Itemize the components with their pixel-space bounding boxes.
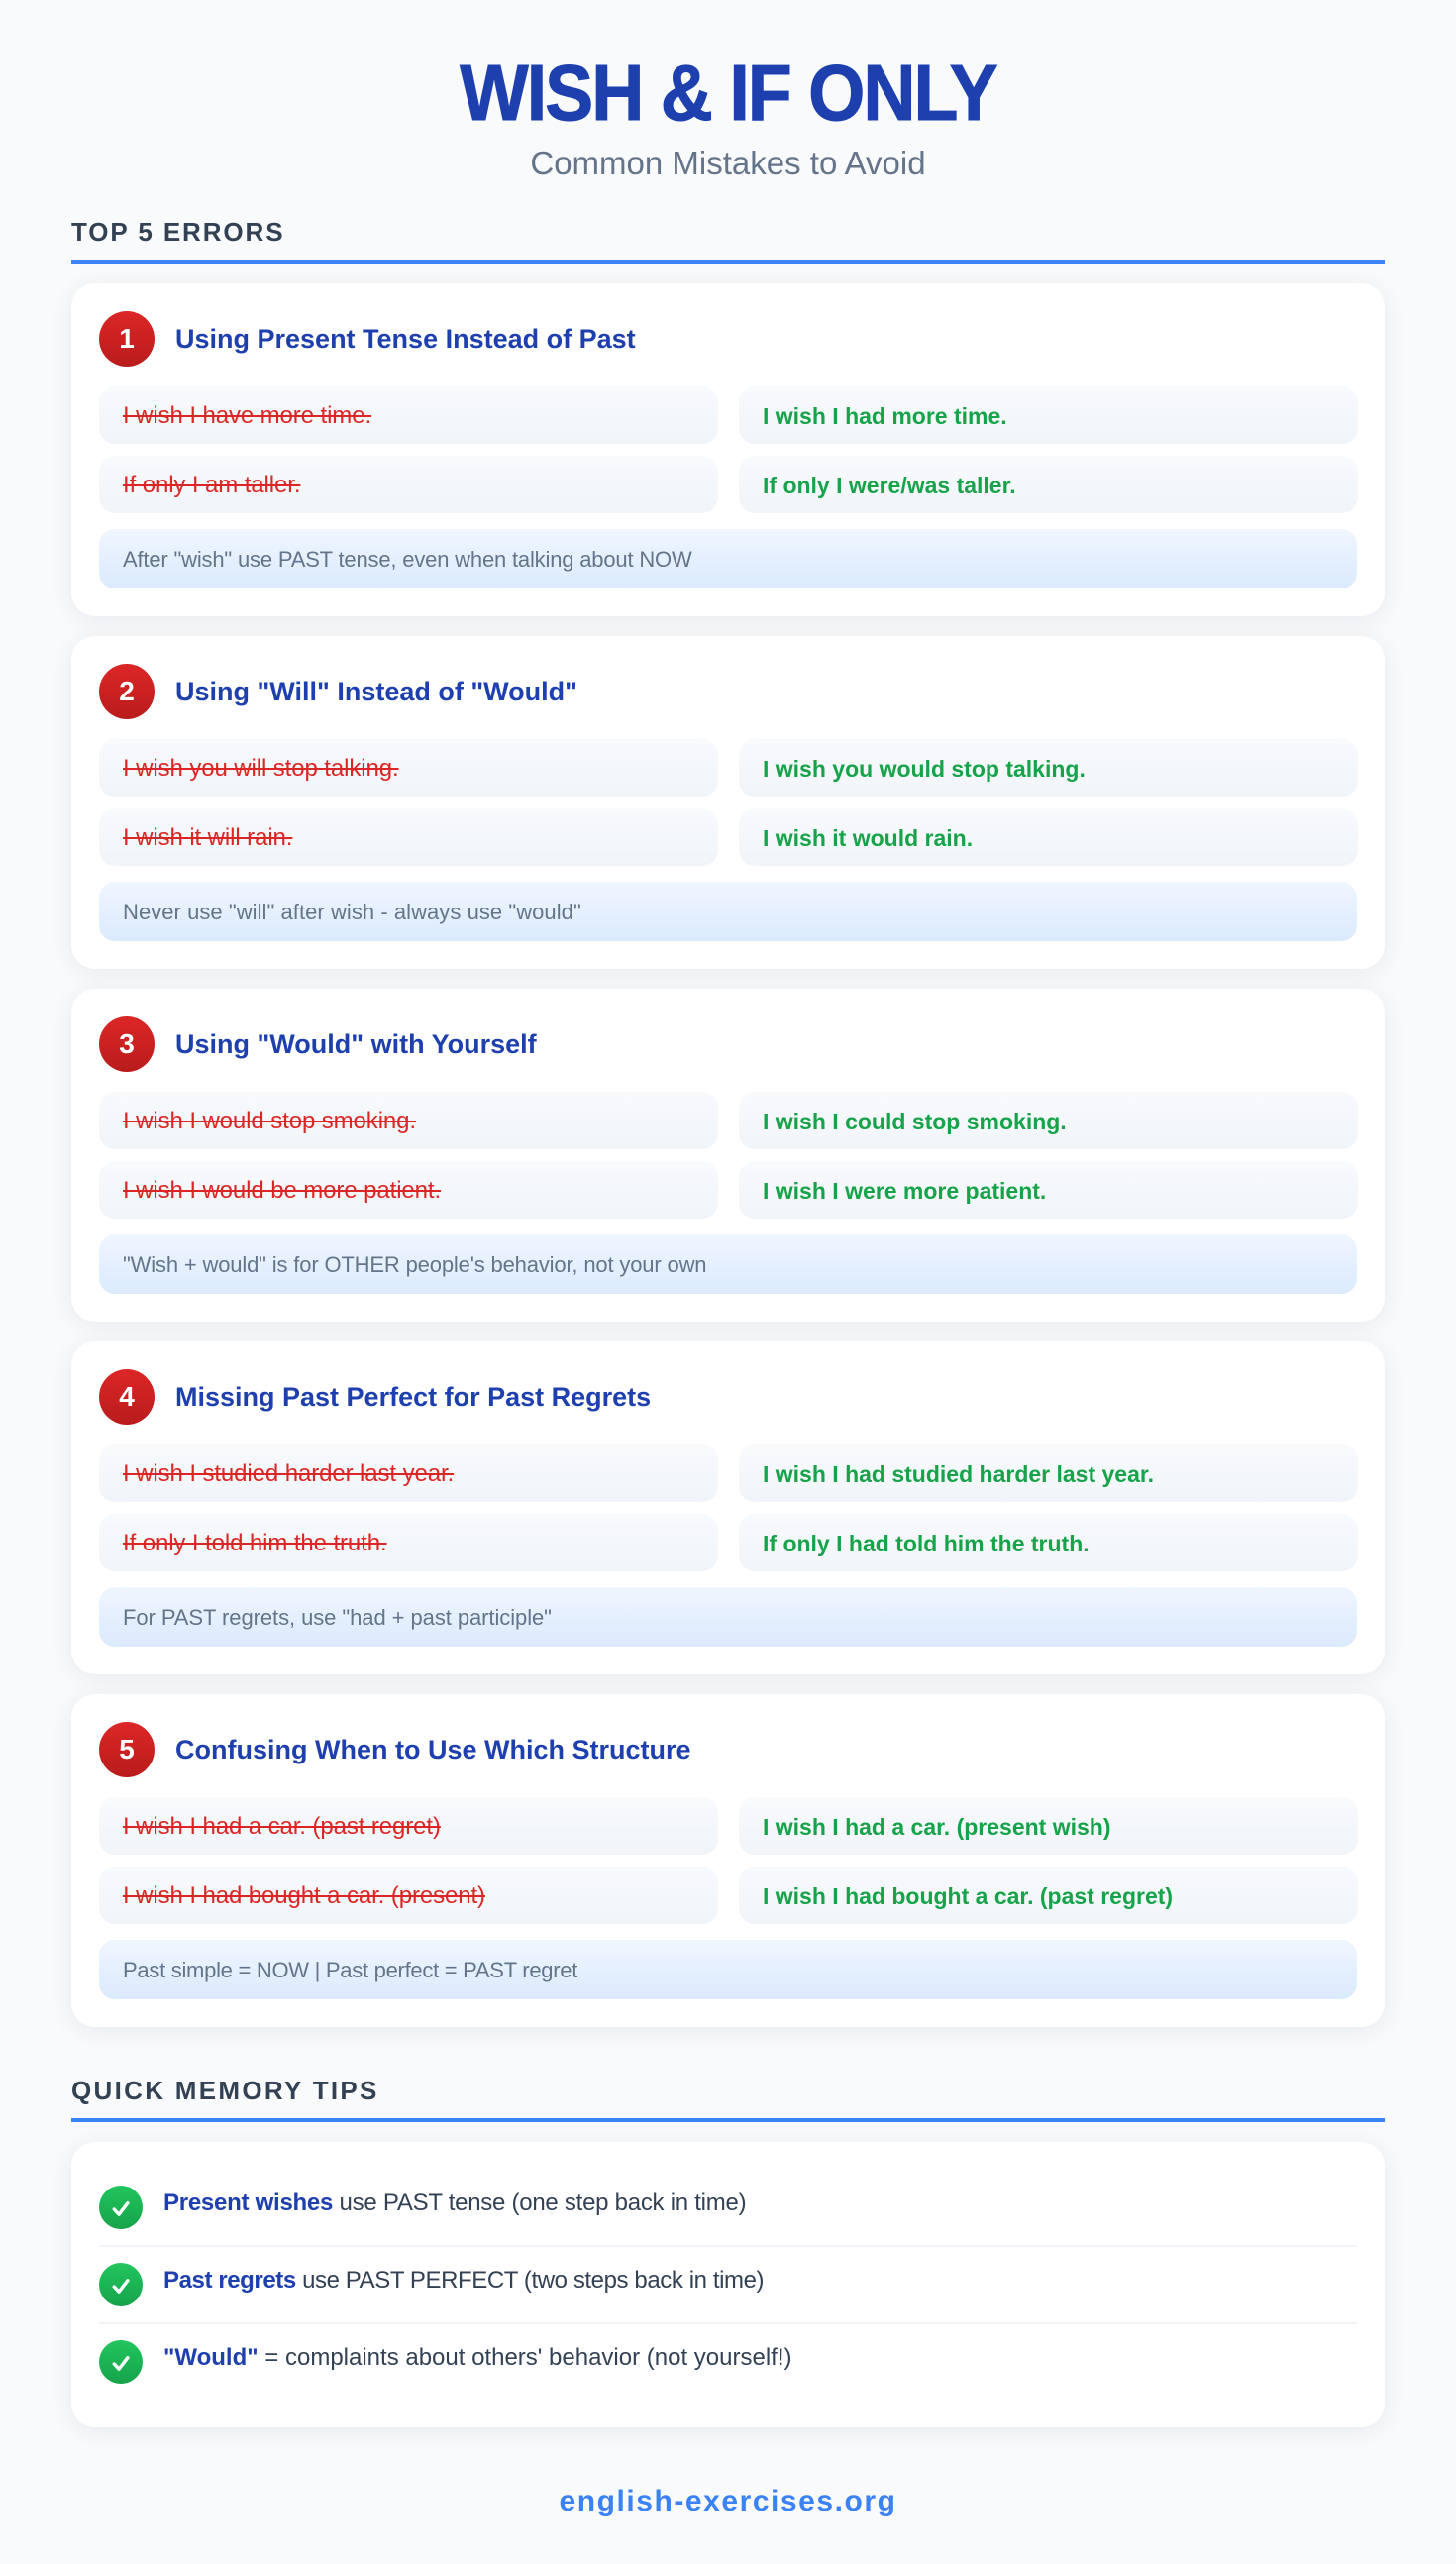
number badge 1 bbox=[99, 311, 155, 367]
correct example bbox=[739, 1797, 1358, 1855]
correct example: I wish you would stop talking. bbox=[763, 756, 1086, 782]
wrong example bbox=[99, 386, 718, 444]
wrong example bbox=[99, 1161, 718, 1219]
correct example: I wish it would rain. bbox=[763, 825, 973, 851]
wrong example: I wish I had a car. (past regret) bbox=[123, 1813, 441, 1840]
wrong example bbox=[99, 808, 718, 866]
panel: error 5 bbox=[71, 1694, 1385, 2027]
error 5 heading: Confusing When to Use Which Structure bbox=[175, 1735, 691, 1764]
wrong example bbox=[99, 1092, 718, 1149]
error 4 heading: Missing Past Perfect for Past Regrets bbox=[175, 1382, 651, 1412]
tip 1 bbox=[99, 2186, 746, 2229]
correct example: I wish I had studied harder last year. bbox=[763, 1461, 1154, 1487]
rule note: After "wish" use PAST tense, even when talking about NOW bbox=[123, 547, 692, 572]
panel: error 1 bbox=[71, 283, 1385, 616]
correct example: If only I were/was taller. bbox=[763, 473, 1016, 498]
wrong example: I wish I had bought a car. (present) bbox=[123, 1882, 485, 1909]
panel: memory tips bbox=[71, 2142, 1385, 2427]
number badge 1: 1 bbox=[119, 323, 135, 354]
rule note: Past simple = NOW | Past perfect = PAST regret bbox=[123, 1958, 577, 1982]
wrong example: I wish I would be more patient. bbox=[123, 1177, 441, 1204]
subtitle: Common Mistakes to Avoid bbox=[530, 145, 926, 181]
section heading: quick memory tips: QUICK MEMORY TIPS bbox=[71, 2076, 379, 2105]
correct example bbox=[739, 1867, 1358, 1924]
wrong example: I wish I studied harder last year. bbox=[123, 1460, 454, 1487]
tip 2 text: Past regrets use PAST PERFECT (two steps back in time) bbox=[163, 2267, 764, 2294]
panel: error 3 bbox=[71, 989, 1385, 1322]
correct example bbox=[739, 1092, 1358, 1149]
number badge 4 bbox=[99, 1369, 155, 1425]
icon: check bbox=[99, 2263, 143, 2306]
wrong example bbox=[99, 1444, 718, 1502]
rule note bbox=[99, 529, 1357, 588]
rule note: Never use "will" after wish - always use "would" bbox=[123, 900, 581, 924]
tip 2 bbox=[99, 2263, 764, 2306]
rule note: For PAST regrets, use "had + past participle" bbox=[123, 1605, 552, 1630]
wrong example bbox=[99, 739, 718, 797]
wrong example: I wish I would stop smoking. bbox=[123, 1108, 416, 1134]
correct example bbox=[739, 456, 1358, 513]
rule note bbox=[99, 882, 1357, 941]
rule note bbox=[99, 1587, 1357, 1647]
correct example bbox=[739, 1161, 1358, 1219]
correct example: I wish I had a car. (present wish) bbox=[763, 1814, 1111, 1840]
wrong example bbox=[99, 1514, 718, 1571]
correct example bbox=[739, 739, 1358, 797]
wrong example: I wish it will rain. bbox=[123, 824, 292, 851]
correct example bbox=[739, 808, 1358, 866]
icon: check bbox=[99, 2340, 143, 2384]
wrong example bbox=[99, 1797, 718, 1855]
correct example: I wish I were more patient. bbox=[763, 1178, 1046, 1204]
wrong example bbox=[99, 1867, 718, 1924]
footer: english-exercises.org bbox=[559, 2485, 897, 2517]
number badge 5 bbox=[99, 1722, 155, 1777]
error 1 heading: Using Present Tense Instead of Past bbox=[175, 324, 636, 354]
rule note bbox=[99, 1234, 1357, 1294]
number badge 2 bbox=[99, 664, 155, 719]
error 2 heading: Using "Will" Instead of "Would" bbox=[175, 677, 577, 706]
section heading: top 5 errors: TOP 5 ERRORS bbox=[71, 217, 284, 247]
tip 1 text: Present wishes use PAST tense (one step back in time) bbox=[163, 2190, 746, 2216]
number badge 2: 2 bbox=[119, 676, 135, 706]
wrong example: If only I am taller. bbox=[123, 472, 300, 498]
tip 3 text: "Would" = complaints about others' behavior (not yourself!) bbox=[163, 2344, 792, 2371]
title: WISH & IF ONLY bbox=[460, 49, 996, 137]
correct example: I wish I could stop smoking. bbox=[763, 1109, 1067, 1134]
correct example: I wish I had more time. bbox=[763, 403, 1007, 429]
icon: check bbox=[99, 2186, 143, 2229]
wrong example: I wish you will stop talking. bbox=[123, 755, 399, 782]
rule note: "Wish + would" is for OTHER people's behavior, not your own bbox=[123, 1252, 706, 1277]
wrong example bbox=[99, 456, 718, 513]
panel: error 2 bbox=[71, 636, 1385, 969]
correct example bbox=[739, 1444, 1358, 1502]
number badge 5: 5 bbox=[119, 1734, 135, 1764]
error 3 heading: Using "Would" with Yourself bbox=[175, 1029, 537, 1059]
wrong example: I wish I have more time. bbox=[123, 402, 371, 429]
rule note bbox=[99, 1940, 1357, 1999]
number badge 3: 3 bbox=[119, 1028, 135, 1059]
correct example bbox=[739, 386, 1358, 444]
correct example bbox=[739, 1514, 1358, 1571]
panel: error 4 bbox=[71, 1341, 1385, 1674]
number badge 4: 4 bbox=[119, 1381, 135, 1412]
correct example: I wish I had bought a car. (past regret) bbox=[763, 1883, 1173, 1909]
tip 3 bbox=[99, 2340, 792, 2384]
number badge 3 bbox=[99, 1016, 155, 1072]
correct example: If only I had told him the truth. bbox=[763, 1531, 1090, 1556]
wrong example: If only I told him the truth. bbox=[123, 1530, 387, 1556]
